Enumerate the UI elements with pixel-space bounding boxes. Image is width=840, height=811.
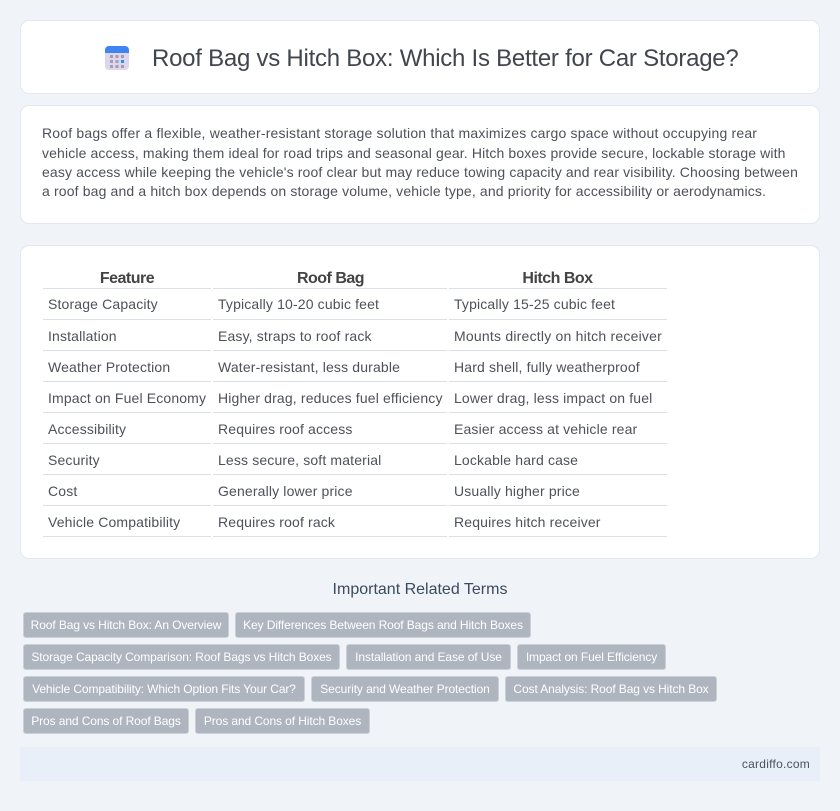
table rows: Requires roof rack (218, 514, 335, 530)
table rows: Requires hitch receiver (454, 514, 601, 530)
table rows: Vehicle Compatibility (48, 514, 180, 530)
related terms tags: Roof Bag vs Hitch Box: An Overview (31, 618, 221, 632)
comparison table panel (20, 245, 820, 559)
related terms tags: Vehicle Compatibility: Which Option Fits Your Car? (32, 682, 296, 696)
table rows: Accessibility (48, 421, 126, 437)
table rows: Requires roof access (218, 421, 353, 437)
related terms tags: Pros and Cons of Roof Bags (31, 714, 181, 728)
table header: Hitch Box (522, 270, 593, 287)
table rows: Easier access at vehicle rear (454, 421, 637, 437)
table rows: Lower drag, less impact on fuel (454, 390, 652, 406)
table rows: Generally lower price (218, 483, 353, 499)
related terms tags (23, 612, 717, 734)
related terms tags: Security and Weather Protection (320, 682, 490, 696)
related terms heading: Important Related Terms (333, 581, 507, 598)
intro paragraph (42, 125, 798, 199)
header card (20, 20, 820, 94)
table header: Feature (100, 270, 154, 287)
table rows: Mounts directly on hitch receiver (454, 328, 662, 344)
title: Roof Bag vs Hitch Box: Which Is Better for Car Storage? (152, 45, 738, 72)
table rows: Water-resistant, less durable (218, 359, 400, 375)
table rows: Typically 15-25 cubic feet (454, 296, 615, 312)
related terms tags: Installation and Ease of Use (355, 650, 502, 664)
intro paragraph: a roof bag and a hitch box depends on storage volume, vehicle type, and priority for accessibility or aerodynamics. (42, 183, 766, 199)
table rows: Less secure, soft material (218, 452, 381, 468)
icon: calendar (105, 46, 129, 70)
footer site name: cardiffo.com (742, 757, 810, 771)
table rows: Higher drag, reduces fuel efficiency (218, 390, 443, 406)
table rows: Typically 10-20 cubic feet (218, 296, 379, 312)
table rows: Security (48, 452, 100, 468)
intro text panel (20, 105, 820, 224)
related terms tags: Cost Analysis: Roof Bag vs Hitch Box (513, 682, 709, 696)
intro paragraph: easy access while keeping the vehicle's roof clear but may reduce towing capacity and rear visibility. Choosing between (42, 164, 798, 180)
related terms tags: Key Differences Between Roof Bags and Hitch Boxes (243, 618, 523, 632)
table rows: Impact on Fuel Economy (48, 390, 206, 406)
table rows: Cost (48, 483, 77, 499)
table rows: Easy, straps to roof rack (218, 328, 372, 344)
intro paragraph: vehicle access, making them ideal for road trips and seasonal gear. Hitch boxes provide secure, lockable storage with (42, 145, 786, 161)
related terms tags: Storage Capacity Comparison: Roof Bags vs Hitch Boxes (31, 650, 332, 664)
table rows: Storage Capacity (48, 296, 158, 312)
table rows: Hard shell, fully weatherproof (454, 359, 640, 375)
table header: Roof Bag (297, 270, 364, 287)
table rows (43, 288, 667, 537)
table rows: Lockable hard case (454, 452, 578, 468)
table rows: Weather Protection (48, 359, 170, 375)
table rows: Usually higher price (454, 483, 580, 499)
footer bar (20, 747, 820, 781)
intro paragraph: Roof bags offer a flexible, weather-resistant storage solution that maximizes cargo space without occupying rear (42, 125, 757, 141)
table header (100, 270, 593, 287)
table rows: Installation (48, 328, 117, 344)
related terms tags: Pros and Cons of Hitch Boxes (204, 714, 361, 728)
related terms tags: Impact on Fuel Efficiency (526, 650, 657, 664)
